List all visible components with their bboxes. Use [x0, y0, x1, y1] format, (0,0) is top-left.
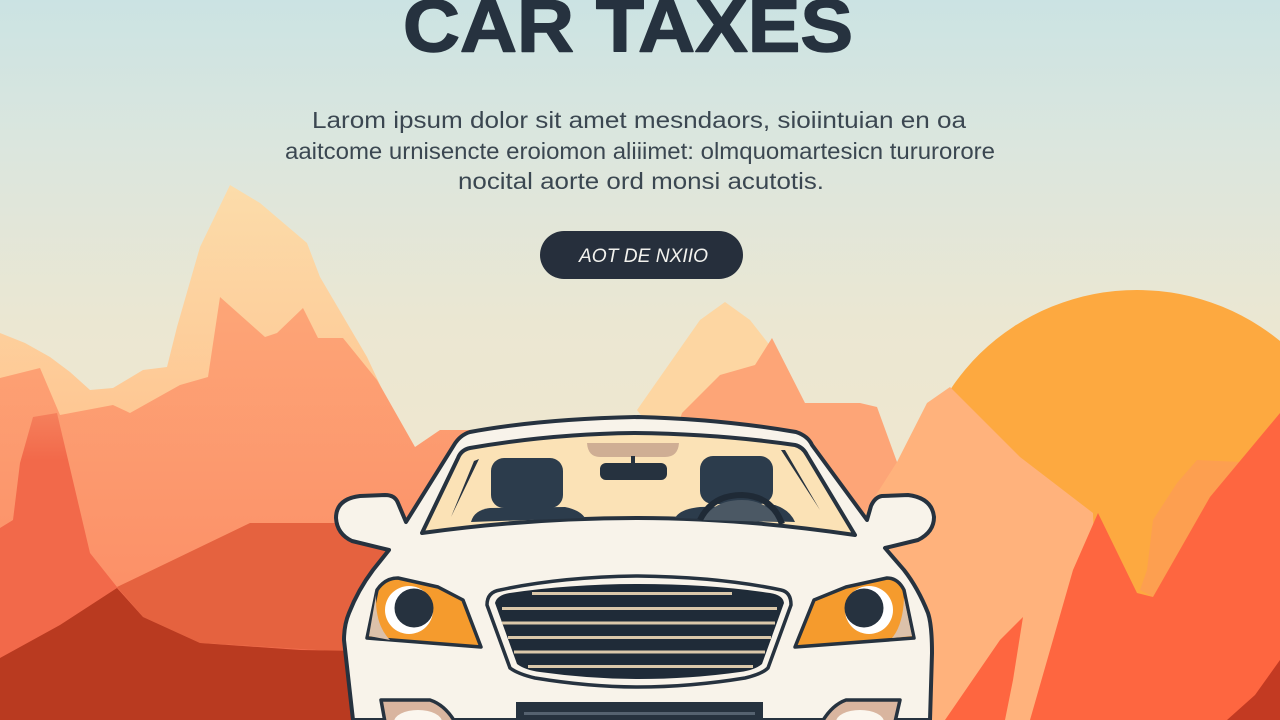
lower air intake: [516, 702, 763, 720]
intro paragraph: [285, 107, 995, 194]
mountain: dark salmon left: [0, 413, 350, 720]
mountain: red flame: [945, 617, 1023, 720]
right fog light: [822, 700, 900, 720]
left fog light: [381, 700, 455, 720]
mountain: pale back range left: [0, 185, 420, 520]
mountain: peach right: [860, 387, 1100, 720]
left seat: [471, 458, 585, 522]
hill: deep red foreground: [0, 588, 420, 720]
button: [540, 231, 743, 279]
right headlight: [795, 578, 914, 647]
steering wheel: [700, 495, 782, 524]
mountain: dark red corner: [1227, 660, 1280, 720]
mountain: pale centre peak: [637, 302, 820, 440]
sun visor: [587, 443, 679, 457]
windshield: [422, 433, 855, 535]
sun: [915, 290, 1280, 720]
car: [336, 417, 934, 720]
windshield reflections: [451, 450, 820, 517]
mountain: salmon centre: [640, 338, 930, 540]
scenery: mountains and sun: [0, 185, 1280, 720]
mountain: orange shade under sun: [1140, 460, 1240, 597]
car body: [336, 417, 934, 720]
button: AOT DE NXIIO: [578, 246, 708, 267]
hill: red mid: [117, 523, 420, 660]
mountain: salmon left range: [0, 297, 480, 720]
grille slats: [502, 592, 777, 668]
intro paragraph: aaitcome urnisencte eroiomon aliiimet: olmquomartesicn tururorore: [285, 138, 995, 164]
grille: [487, 576, 791, 687]
intro paragraph: nocital aorte ord monsi acutotis.: [458, 168, 824, 194]
rearview mirror: [600, 456, 667, 480]
intro paragraph: Larom ipsum dolor sit amet mesndaors, sioiintuian en oa: [312, 107, 967, 133]
mountain: red right: [1030, 413, 1280, 720]
right seat: [675, 456, 795, 522]
left headlight: [367, 578, 481, 647]
